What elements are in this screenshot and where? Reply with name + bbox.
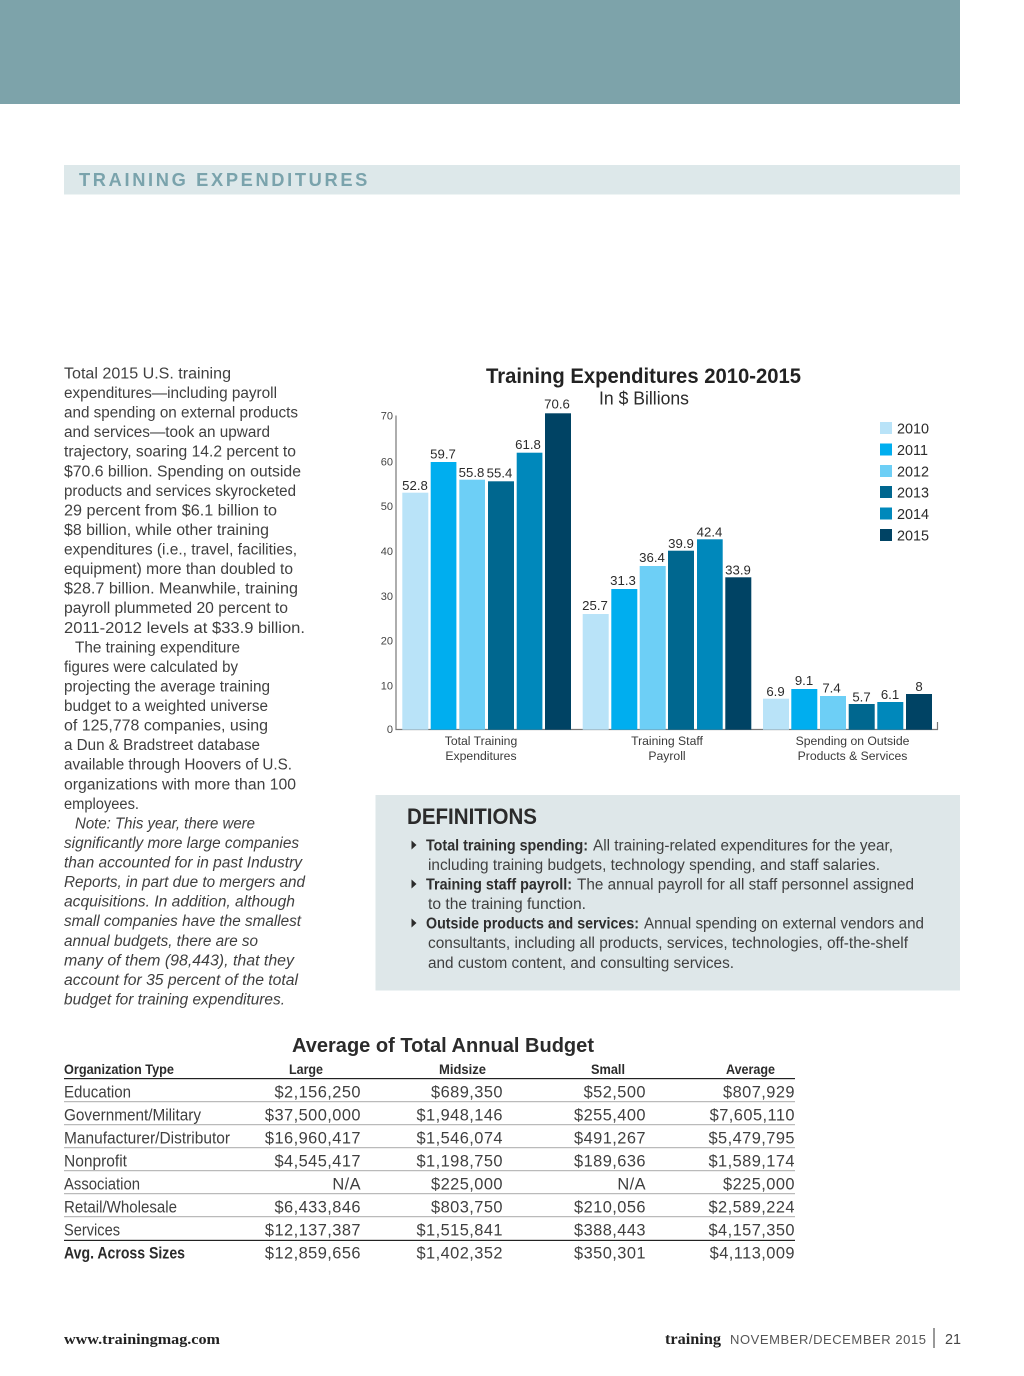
budget table (64, 1061, 795, 1262)
legend: 2015 (897, 528, 929, 544)
row: nonprofit: $1,198,750 (416, 1152, 503, 1170)
row: association: N/A (332, 1176, 361, 1194)
y axis: 50 (381, 501, 393, 513)
y axis: 30 (381, 591, 393, 603)
row: education: $689,350 (431, 1084, 503, 1102)
category labels: Total Training (445, 734, 517, 748)
definition: outside products and services: Outside products and services: (426, 916, 639, 932)
italic note text: small companies have the smallest (64, 913, 302, 930)
body text column: available through Hoovers of U.S. (64, 757, 292, 774)
definition: outside products and services: Annual spending on external vendors and (644, 916, 924, 932)
row: association (64, 1174, 795, 1194)
row: nonprofit: $189,636 (574, 1152, 646, 1170)
body text column: 2011-2012 levels at $33.9 billion. (64, 620, 305, 637)
italic note text (64, 815, 306, 1008)
body text column: budget to a weighted universe (64, 698, 268, 715)
panel: definitions (376, 795, 960, 990)
definition: total training spending: including training budgets, technology spending, and staff salaries. (428, 857, 880, 874)
bar group: total training expenditures: 55.8 (459, 465, 484, 480)
body text column: $8 billion, while other training (64, 522, 269, 539)
row: average across sizes: Avg. Across Sizes (64, 1244, 185, 1262)
body text column: 29 percent from $6.1 billion to (64, 502, 277, 519)
y axis: 0 (387, 724, 393, 736)
body text column: figures were calculated by (64, 659, 238, 676)
legend: 2013 (897, 486, 929, 502)
row: average across sizes (64, 1244, 795, 1262)
definition: total training spending (412, 838, 893, 874)
bar group: training staff payroll: 33.9 (725, 562, 751, 578)
row: government/military: $37,500,000 (265, 1106, 361, 1124)
row: government/military: Government/Military (64, 1106, 201, 1124)
row: services: Services (64, 1220, 120, 1240)
row: manufacturer/distributor: Manufacturer/Distributor (64, 1128, 230, 1148)
bar group: spending on outside products and services: 6.1 (881, 687, 899, 702)
row: association: Association (64, 1174, 140, 1194)
italic note text: than accounted for in past Industry (64, 854, 303, 872)
row: manufacturer/distributor: $16,960,417 (265, 1130, 361, 1148)
row: education: $2,156,250 (274, 1084, 361, 1102)
row: nonprofit: $1,589,174 (708, 1152, 795, 1170)
row: nonprofit: $4,545,417 (274, 1152, 361, 1170)
bar group: total training expenditures: 70.6 (544, 396, 570, 412)
body text column: employees. (64, 796, 139, 813)
bar group: training staff payroll: 42.4 (697, 524, 722, 540)
row: nonprofit: Nonprofit (64, 1152, 127, 1170)
body text column: $28.7 billion. Meanwhile, training (64, 581, 298, 598)
footer issue and page number: NOVEMBER/DECEMBER 2015 (730, 1332, 926, 1347)
italic note text: account for 35 percent of the total (64, 972, 299, 989)
bar group: spending on outside products and services: 6.9 (766, 684, 785, 699)
italic note text: acquisitions. In addition, although (64, 894, 295, 911)
category labels (445, 734, 910, 763)
footer issue and page number: training (665, 1331, 721, 1348)
body text column (64, 366, 305, 813)
table header: Organization Type (64, 1061, 174, 1077)
legend (880, 422, 929, 544)
category labels: Training Staff (631, 734, 704, 748)
table header (64, 1061, 775, 1077)
y axis (381, 410, 938, 736)
table header: Average (726, 1061, 775, 1077)
bar group: training staff payroll: 39.9 (668, 536, 694, 551)
row: government/military (64, 1106, 795, 1124)
bar group: spending on outside products and services: 7.4 (822, 680, 841, 695)
y axis: 70 (381, 410, 393, 422)
definition: total training spending: Total training spending: (426, 838, 588, 854)
italic note text: budget for training expenditures. (64, 992, 285, 1008)
chart title: Training Expenditures 2010-2015 (486, 365, 801, 388)
body text column: The training expenditure (75, 639, 240, 656)
bar group: training staff payroll: 36.4 (639, 550, 665, 565)
row: manufacturer/distributor: $1,546,074 (416, 1130, 503, 1148)
body text column: $70.6 billion. Spending on outside (64, 463, 301, 480)
footer website: www.trainingmag.com (64, 1332, 220, 1348)
row: manufacturer/distributor: $5,479,795 (708, 1130, 795, 1148)
category labels: Expenditures (445, 749, 517, 763)
body text column: products and services skyrocketed (64, 483, 296, 500)
body text column: expenditures—including payroll (64, 385, 277, 402)
row: retail/wholesale: $210,056 (574, 1198, 646, 1216)
table title: Average of Total Annual Budget (292, 1034, 594, 1057)
row: association: N/A (617, 1176, 646, 1194)
row: government/military: $255,400 (574, 1106, 646, 1124)
y axis: 20 (381, 636, 393, 648)
legend: 2012 (897, 464, 929, 480)
top colour band (0, 0, 960, 104)
italic note text: many of them (98,443), that they (64, 952, 295, 969)
table header: Large (289, 1061, 323, 1077)
table header: Small (591, 1061, 625, 1077)
italic note text: Reports, in part due to mergers and (64, 874, 306, 891)
row: retail/wholesale: Retail/Wholesale (64, 1198, 177, 1216)
row: services: $1,515,841 (416, 1222, 503, 1240)
row: retail/wholesale (64, 1198, 795, 1216)
row: education: $52,500 (584, 1084, 646, 1102)
bar group: training staff payroll (582, 524, 751, 730)
body text column: expenditures (i.e., travel, facilities, (64, 542, 297, 558)
body text column: payroll plummeted 20 percent to (64, 600, 288, 617)
category labels: Products & Services (798, 749, 907, 763)
bar group: training staff payroll: 25.7 (582, 598, 608, 613)
body text column: organizations with more than 100 (64, 776, 296, 793)
section heading: training expenditures (64, 165, 960, 194)
legend: 2014 (897, 507, 929, 523)
row: services: $12,137,387 (265, 1222, 361, 1240)
definition: training staff payroll: The annual payroll for all staff personnel assigned (577, 876, 914, 894)
footer issue and page number: 21 (945, 1332, 961, 1348)
bar group: total training expenditures: 52.8 (402, 478, 428, 493)
y axis: 60 (381, 456, 393, 468)
row: average across sizes: $4,113,009 (710, 1244, 795, 1262)
body text column: equipment) more than doubled to (64, 561, 293, 578)
bar group: spending on outside products and services: 9.1 (795, 673, 813, 688)
definition: outside products and services: and custom content, and consulting services. (428, 955, 734, 972)
row: average across sizes: $12,859,656 (265, 1244, 361, 1262)
row: retail/wholesale: $803,750 (431, 1198, 503, 1216)
definition: training staff payroll (412, 876, 914, 913)
bar group: total training expenditures: 59.7 (430, 446, 456, 462)
definition: total training spending: All training-related expenditures for the year, (593, 838, 893, 854)
definition: training staff payroll: Training staff payroll: (426, 876, 572, 894)
legend: 2011 (897, 443, 928, 459)
body text column: projecting the average training (64, 678, 270, 696)
row: association: $225,000 (431, 1176, 503, 1194)
row: education: $807,929 (723, 1084, 795, 1102)
chart subtitle: In $ Billions (599, 388, 689, 408)
row: average across sizes: $1,402,352 (416, 1244, 503, 1262)
row: education (64, 1082, 795, 1102)
body text column: Total 2015 U.S. training (64, 366, 231, 382)
row: manufacturer/distributor: $491,267 (574, 1130, 646, 1148)
section heading: training expenditures: TRAINING EXPENDITURES (79, 170, 370, 190)
row: services (64, 1220, 795, 1240)
bar group: spending on outside products and services (763, 673, 932, 730)
body text column: a Dun & Bradstreet database (64, 737, 260, 754)
bar group: spending on outside products and services: 5.7 (852, 690, 871, 704)
bar group: training staff payroll: 31.3 (610, 573, 636, 588)
row: retail/wholesale: $6,433,846 (274, 1198, 361, 1216)
row: average across sizes: $350,301 (574, 1244, 646, 1262)
table header: Midsize (439, 1061, 486, 1077)
body text column: and spending on external products (64, 405, 298, 422)
footer issue and page number (665, 1328, 961, 1348)
italic note text: significantly more large companies (64, 835, 299, 852)
italic note text: Note: This year, there were (75, 815, 255, 832)
row: government/military: $1,948,146 (416, 1106, 503, 1124)
bar group: spending on outside products and services: 8 (915, 679, 923, 694)
y axis: 40 (381, 546, 393, 558)
definition: outside products and services: consultants, including all products, services, technologies, off-the-shelf (428, 935, 909, 952)
row: manufacturer/distributor (64, 1128, 795, 1148)
bar group: total training expenditures: 61.8 (515, 437, 541, 452)
row: nonprofit (64, 1152, 795, 1170)
definition: training staff payroll: to the training function. (428, 896, 586, 913)
bar chart: training expenditures 2010-2015 (381, 365, 938, 763)
category labels: Payroll (648, 749, 686, 763)
row: retail/wholesale: $2,589,224 (708, 1198, 795, 1216)
body text column: trajectory, soaring 14.2 percent to (64, 444, 296, 461)
row: government/military: $7,605,110 (710, 1106, 795, 1124)
category labels: Spending on Outside (796, 734, 910, 748)
row: education: Education (64, 1082, 131, 1102)
row: services: $388,443 (574, 1222, 646, 1240)
bar group: total training expenditures (402, 396, 571, 730)
body text column: and services—took an upward (64, 424, 270, 441)
definition: outside products and services (412, 916, 924, 972)
y axis: 10 (381, 681, 393, 693)
body text column: of 125,778 companies, using (64, 718, 268, 735)
row: services: $4,157,350 (708, 1222, 795, 1240)
definitions heading: DEFINITIONS (407, 804, 537, 829)
italic note text: annual budgets, there are so (64, 933, 258, 950)
legend: 2010 (897, 422, 929, 438)
bar group: total training expenditures: 55.4 (487, 466, 512, 480)
row: association: $225,000 (723, 1176, 795, 1194)
